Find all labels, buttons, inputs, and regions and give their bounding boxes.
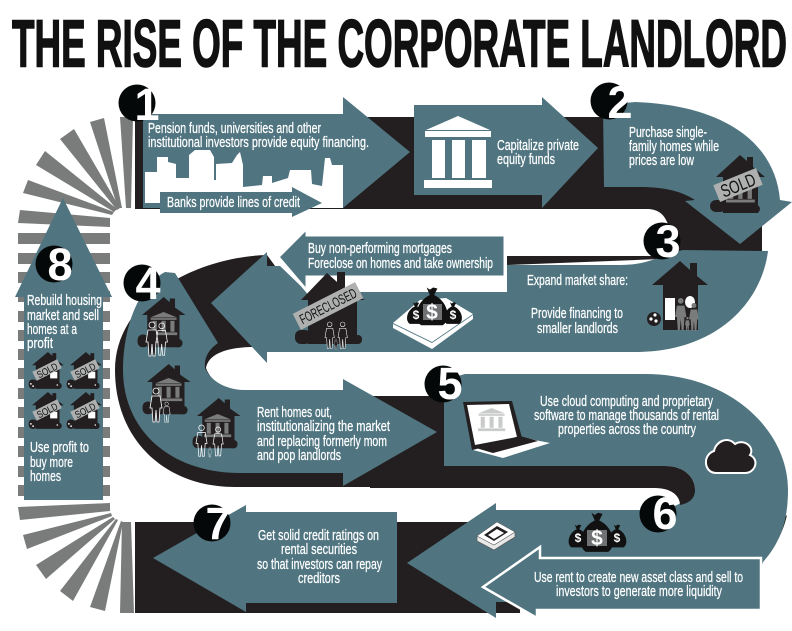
step 8 arrow [15,198,112,500]
sold tag step 2 [713,168,763,203]
sold tag step 2: SOLD [718,169,759,201]
icon: money on paper [393,287,473,349]
black road [115,117,787,613]
icon: money bags step 6: $ [591,527,603,550]
icon: laptop [463,401,550,458]
step 7 arrow [153,505,397,612]
text: buy mortgages: Buy non-performing mortgages [308,240,452,257]
text: step 7: creditors [298,570,340,587]
icon: four sold houses: SOLD [73,401,98,421]
text: step 5: Use cloud computing and proprietary [540,393,713,410]
text: step 2: family homes while [629,138,719,155]
icon: money on paper: $ [413,308,420,322]
text: step 8: homes at a [27,321,77,338]
panel: step 1 arrow [143,97,410,208]
text: step 1: institutional investors provide equity financing. [148,134,369,151]
icon: money bags step 6: $ [575,531,582,545]
text: step 5 [534,393,719,438]
panel: step 2 arrow [603,102,792,244]
text: capitalize: equity funds [497,151,555,168]
text: step 1 [148,120,369,151]
panel: step 4 band [123,272,437,486]
text: buy mortgages: Foreclose on homes and take ownership [308,255,493,272]
icon: four sold houses: SOLD [73,361,98,381]
text: step 7 [257,527,382,587]
text: step 2: Purchase single- [629,124,707,141]
people foreclosed [325,322,347,349]
text: step 1: Pension funds, universities and other [148,120,321,137]
icon: sold house step 2 [710,155,765,213]
banks arrow [160,187,322,217]
icon: house 3 step 4 [192,398,240,457]
buy arrow [278,228,505,291]
icon: foreclosed house [295,272,365,344]
number badge 6 [640,488,678,539]
skyline [145,150,343,208]
text: step 3: smaller landlords [537,320,618,337]
text: step 5: properties across the country [558,421,696,438]
text: step 8: Use profit to [30,439,89,456]
text: step 7: rental securities [281,541,357,558]
icon: house 2 step 4 [142,364,190,422]
icon: white bank [424,116,492,188]
number badge 1: 1 [134,79,160,130]
text: step 4: institutionalizing the market [257,418,391,435]
text: step 8: market and sell [27,307,99,324]
icon: house 1 step 4 [138,297,186,356]
icon: money on paper: $ [426,301,438,324]
icon: cloud [706,440,755,473]
text: step 4: Rent homes out, [257,404,332,421]
number badge 1 [118,79,160,130]
number badge 4 [124,258,161,309]
number badge 6: 6 [652,488,678,539]
text: buy mortgages [308,240,493,272]
text: step 2 [629,124,719,169]
icon: stack of papers [477,522,515,550]
number badge 2 [590,77,633,128]
icon: four sold houses [29,352,102,429]
text: step 8: buy more [30,454,73,471]
text: capitalize [497,137,579,168]
number badge 7 [194,498,231,549]
text: step 3 [527,272,628,337]
text: step 4: and replacing formerly mom [257,433,387,450]
number badge 8: 8 [47,239,73,290]
striped fan and ladder road [18,117,134,613]
text: step 2: prices are low [629,152,694,169]
icon: money on paper: $ [450,308,457,322]
panel: step 3 band [211,250,768,363]
text: step 8: homes [30,468,61,485]
text: step 7: so that investors can repay [257,556,382,573]
foreclosed tag: FORECLOSED [297,285,359,327]
text: step 4 [257,404,391,464]
text: step 4: and pop landlords [257,447,341,464]
panel: capitalize arrow [414,97,598,208]
icon: house with family step 3 [647,261,708,331]
number badge 5: 5 [437,358,463,409]
use rent arrow [483,547,761,618]
text: step 6: investors to generate more liquidity [556,583,722,600]
number badge 3 [644,216,681,267]
text: step 7: Get solid credit ratings on [258,527,379,544]
icon: money bags step 6 [569,513,626,552]
number badge 2: 2 [607,77,633,128]
number badge 3: 3 [655,216,681,267]
text: capitalize: Capitalize private [497,137,579,154]
text: step 8 [27,292,102,485]
black road tip step 5 [370,396,695,505]
text: step 3: Expand market share: [527,272,628,289]
white gap in road [206,347,500,396]
text: step 5: software to manage thousands of rental [534,407,719,424]
icon: money bags step 6: $ [614,531,621,545]
foreclosed tag [293,282,363,330]
text: banks: Banks provide lines of credit [167,194,301,211]
icon: four sold houses: SOLD [35,401,60,421]
number badge 8 [36,239,73,290]
icon: four sold houses: SOLD [35,361,60,381]
text: step 6 [534,569,743,600]
text: step 8: profit [27,335,54,352]
number badge 7: 7 [205,498,231,549]
text: step 3: Provide financing to [531,305,623,322]
number badge 4: 4 [135,258,161,309]
text: step 8: Rebuild housing [27,292,102,309]
number badge 5 [424,358,463,409]
panel: step 5 and 6 band [407,374,788,618]
